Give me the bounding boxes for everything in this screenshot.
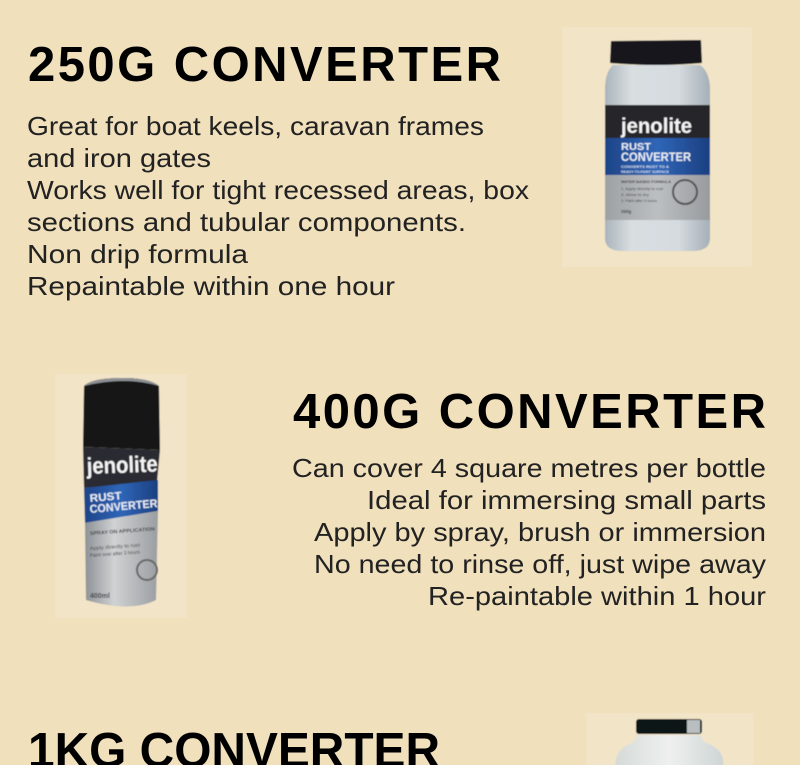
text block: 250g benefits: Non drip formula xyxy=(27,239,249,269)
text block: 400g benefits: No need to rinse off, just wipe away xyxy=(314,549,766,579)
section: 400g converter xyxy=(55,374,766,618)
product image: 250g jar: 1. Apply directly to rust xyxy=(621,186,664,191)
text block: 400g benefits xyxy=(292,453,766,611)
product image: 400g spray can: RUST xyxy=(89,490,122,505)
heading: 250g converter: 250G CONVERTER xyxy=(28,38,501,92)
text block: 250g benefits: sections and tubular components. xyxy=(27,207,466,237)
product image: 400g spray can: Paint over after 3 hours xyxy=(90,549,140,559)
product image: 400g spray can: SPRAY ON APPLICATION xyxy=(90,526,155,537)
product image: 400g spray can: 400ml xyxy=(90,593,110,600)
heading: 400g converter: 400G CONVERTER xyxy=(293,385,766,439)
section: 250g converter xyxy=(27,27,752,301)
product image: 250g jar: READY-TO-PAINT SURFACE xyxy=(621,169,669,174)
product image: 1kg tub xyxy=(586,713,754,765)
text block: 400g benefits: Ideal for immersing small parts xyxy=(367,485,766,515)
text block: 250g benefits: Repaintable within one hour xyxy=(27,271,395,301)
product image: 250g jar: jenolite xyxy=(620,115,692,138)
product image: 250g jar xyxy=(562,27,752,267)
text block: 250g benefits: and iron gates xyxy=(27,143,211,173)
product image: 400g spray can: jenolite xyxy=(85,451,158,479)
text block: 400g benefits: Can cover 4 square metres per bottle xyxy=(292,453,766,483)
product image: 250g jar: CONVERTER xyxy=(621,152,692,164)
product image: 400g spray can: Apply directly to rust xyxy=(90,542,141,552)
product image: 250g jar: WATER BASED FORMULA xyxy=(621,179,671,184)
text block: 250g benefits: Works well for tight recessed areas, box xyxy=(27,175,529,205)
product image: 400g spray can xyxy=(55,374,187,618)
product image: 250g jar: RUST xyxy=(621,141,652,153)
text block: 250g benefits: Great for boat keels, caravan frames xyxy=(27,111,484,141)
product image: 250g jar: CONVERTS RUST TO A xyxy=(621,164,669,169)
section: 1kg converter xyxy=(28,713,754,765)
text block: 400g benefits: Apply by spray, brush or immersion xyxy=(314,517,766,547)
text block: 250g benefits xyxy=(27,111,529,301)
product image: 250g jar: 250g xyxy=(621,209,632,214)
product image: 400g spray can: CONVERTER xyxy=(89,498,159,516)
product image: 250g jar: 3. Paint after 3 hours xyxy=(621,198,657,203)
text block: 400g benefits: Re-paintable within 1 hour xyxy=(428,581,766,611)
product image: 250g jar: 2. Allow to dry xyxy=(621,192,649,197)
